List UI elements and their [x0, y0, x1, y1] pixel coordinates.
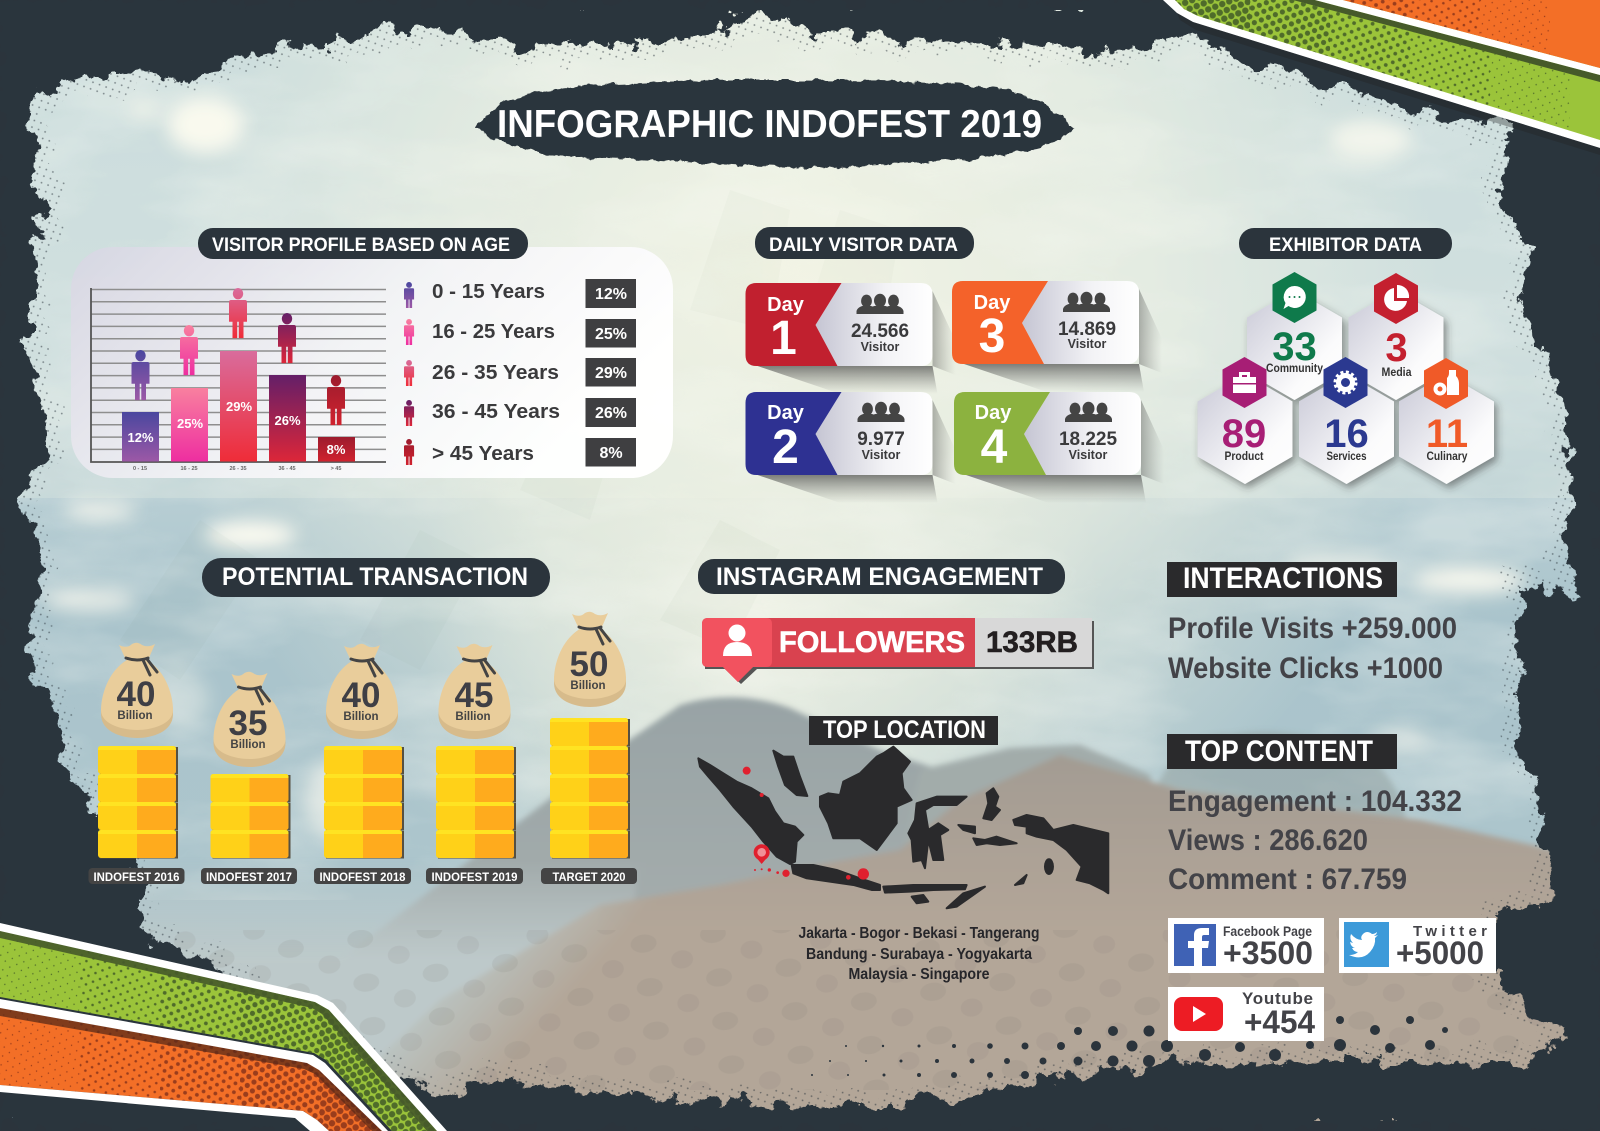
column: indofest 2018 [314, 644, 411, 884]
legend: 36 - 45 Years [432, 401, 560, 423]
column: target 2020: Billion [570, 680, 606, 692]
card: day 1: Visitor [861, 340, 899, 354]
location list [798, 925, 1040, 983]
card: day 4: 18.225 [1059, 429, 1117, 450]
card: day 3: Day [974, 292, 1011, 314]
hex: community [1266, 272, 1324, 375]
column: indofest 2018: Billion [343, 711, 379, 723]
hex: community: 33 [1272, 325, 1317, 369]
social: youtube: +454 [1244, 1004, 1315, 1040]
panel: top content [1167, 734, 1462, 896]
hex: product: Product [1224, 451, 1264, 463]
white hexagons [1198, 290, 1494, 484]
bar chart with person icons: 29% [226, 399, 252, 414]
column: target 2020: 50 [570, 645, 608, 684]
location list: Bandung - Surabaya - Yogyakarta [806, 946, 1032, 963]
column: indofest 2019 [426, 644, 523, 884]
content stats [1168, 785, 1462, 896]
far ridge [900, 745, 1160, 860]
legend: 26 - 35 Years [432, 362, 559, 384]
bar chart with person icons: 26% [274, 413, 301, 428]
heading [1239, 228, 1452, 259]
panel: daily visitor data [746, 227, 1164, 503]
social: youtube [1168, 987, 1324, 1041]
tree line [1150, 732, 1410, 850]
location list: Jakarta - Bogor - Bekasi - Tangerang [798, 925, 1040, 942]
heading: TOP CONTENT [1185, 735, 1373, 768]
card: day 4: Day [975, 402, 1012, 424]
location pins [743, 767, 869, 880]
column: indofest 2017: INDOFEST 2017 [206, 870, 292, 884]
hex: culinary: Culinary [1426, 451, 1468, 463]
hex: product: 89 [1222, 412, 1266, 456]
hex: culinary: 11 [1426, 412, 1468, 456]
legend: > 45 Years [432, 443, 534, 465]
panel: exhibitor data [1198, 228, 1494, 484]
legend [404, 279, 636, 466]
hex: services: Services [1326, 451, 1366, 463]
bar chart with person icons: 25% [177, 416, 203, 431]
card: day 1 [746, 283, 956, 394]
heading: INSTAGRAM ENGAGEMENT [716, 563, 1043, 591]
bar chart with person icons: 36 - 45 [278, 466, 296, 472]
panel: potential transaction [88, 558, 637, 884]
heading [198, 228, 528, 259]
column: indofest 2017: 35 [229, 704, 267, 743]
card: day 4: 4 [981, 421, 1008, 474]
social: youtube: Youtube [1242, 989, 1313, 1008]
content stats: Views : 286.620 [1168, 824, 1368, 857]
hex: services [1324, 357, 1369, 463]
corner ribbon: bottom left [0, 920, 450, 1131]
legend: 12% [595, 286, 627, 303]
hex: culinary [1424, 358, 1468, 463]
ground base [100, 860, 640, 1131]
heading: VISITOR PROFILE BASED ON AGE [212, 234, 510, 256]
watermark shapes [120, 190, 900, 680]
followers badge [702, 618, 1094, 684]
panel: visitor profile based on age [71, 228, 673, 478]
legend: 16 - 25 Years [432, 321, 555, 343]
column: indofest 2019: Billion [455, 711, 491, 723]
interaction stats: Website Clicks +1000 [1168, 652, 1443, 685]
bar chart with person icons: 8% [327, 442, 346, 457]
column: indofest 2016 [88, 643, 184, 884]
icon: user [723, 624, 752, 656]
heading: EXHIBITOR DATA [1269, 234, 1422, 256]
hex: media: 3 [1385, 326, 1408, 370]
bar chart with person icons: 26 - 35 [229, 466, 247, 472]
card: day 2: Day [767, 402, 805, 424]
volcano [340, 697, 1120, 1000]
hex: community: Community [1266, 363, 1324, 375]
interaction stats [1168, 612, 1457, 685]
heading: INTERACTIONS [1183, 562, 1383, 595]
card: day 3 [952, 281, 1162, 392]
halftone dots along bottom edge [811, 1016, 1448, 1079]
card: day 2: Visitor [862, 448, 900, 462]
column: target 2020 [541, 612, 637, 884]
hex: services: 16 [1324, 412, 1369, 456]
card: day 2 [746, 392, 956, 503]
legend: 0 - 15 Years [432, 281, 545, 303]
ground [300, 755, 1600, 1131]
map of Indonesia [698, 747, 1108, 908]
panel: interactions [1167, 562, 1457, 685]
bar chart with person icons: > 45 [331, 466, 341, 472]
column: indofest 2016: Billion [117, 710, 153, 722]
social: twitter: Twitter [1413, 923, 1487, 940]
top location heading: TOP LOCATION [823, 716, 986, 744]
title [474, 80, 1076, 168]
card: day 2: 2 [772, 421, 799, 474]
heading: POTENTIAL TRANSACTION [222, 563, 528, 591]
hill haze [600, 755, 1600, 940]
card: day 3: 3 [979, 310, 1005, 363]
content stats: Engagement : 104.332 [1168, 785, 1462, 818]
followers badge: FOLLOWERS [779, 626, 965, 659]
hex: media: Media [1382, 367, 1412, 379]
heading [202, 558, 550, 597]
column: target 2020: TARGET 2020 [552, 870, 626, 884]
bar chart with person icons: 16 - 25 [180, 466, 198, 472]
social: twitter [1339, 918, 1496, 973]
heading: DAILY VISITOR DATA [769, 234, 958, 256]
column: indofest 2016: 40 [117, 675, 155, 714]
bar chart with person icons: 12% [127, 430, 154, 445]
content stats: Comment : 67.759 [1168, 863, 1407, 896]
hex: product [1222, 357, 1266, 463]
panel background [71, 247, 673, 478]
card: day 1: 24.566 [851, 321, 909, 342]
bar chart with person icons [91, 288, 386, 472]
card: day 1: Day [767, 294, 805, 316]
card: day 4 [954, 392, 1164, 503]
column: indofest 2017: Billion [230, 739, 266, 751]
card: day 1: 1 [770, 312, 797, 365]
legend: 26% [595, 405, 627, 422]
panel: instagram engagement [698, 559, 1108, 983]
title: INFOGRAPHIC INDOFEST 2019 [497, 103, 1042, 146]
legend: 8% [599, 445, 623, 462]
social: facebook: +3500 [1223, 935, 1313, 971]
column: indofest 2018: INDOFEST 2018 [320, 870, 406, 884]
social: facebook [1168, 918, 1324, 973]
social: twitter: +5000 [1396, 935, 1484, 971]
column: indofest 2018: 40 [342, 676, 380, 715]
bar chart with person icons: 0 - 15 [133, 466, 147, 472]
location list: Malaysia - Singapore [848, 966, 990, 983]
column: indofest 2016: INDOFEST 2016 [94, 870, 180, 884]
column: indofest 2019: 45 [455, 676, 493, 715]
card: day 2: 9.977 [857, 429, 905, 450]
legend: 25% [595, 326, 627, 343]
card: day 4: Visitor [1069, 448, 1107, 462]
legend: 29% [595, 365, 627, 382]
followers badge: 133RB [986, 626, 1078, 659]
card: day 3: Visitor [1068, 337, 1106, 351]
column: indofest 2019: INDOFEST 2019 [432, 870, 518, 884]
corner ribbon: top right [1163, 0, 1600, 155]
card: day 3: 14.869 [1058, 319, 1116, 340]
heading [755, 227, 974, 259]
interaction stats: Profile Visits +259.000 [1168, 612, 1457, 645]
column: indofest 2017 [201, 672, 297, 884]
social: facebook: Facebook Page [1223, 923, 1312, 939]
hex: media [1374, 273, 1418, 379]
